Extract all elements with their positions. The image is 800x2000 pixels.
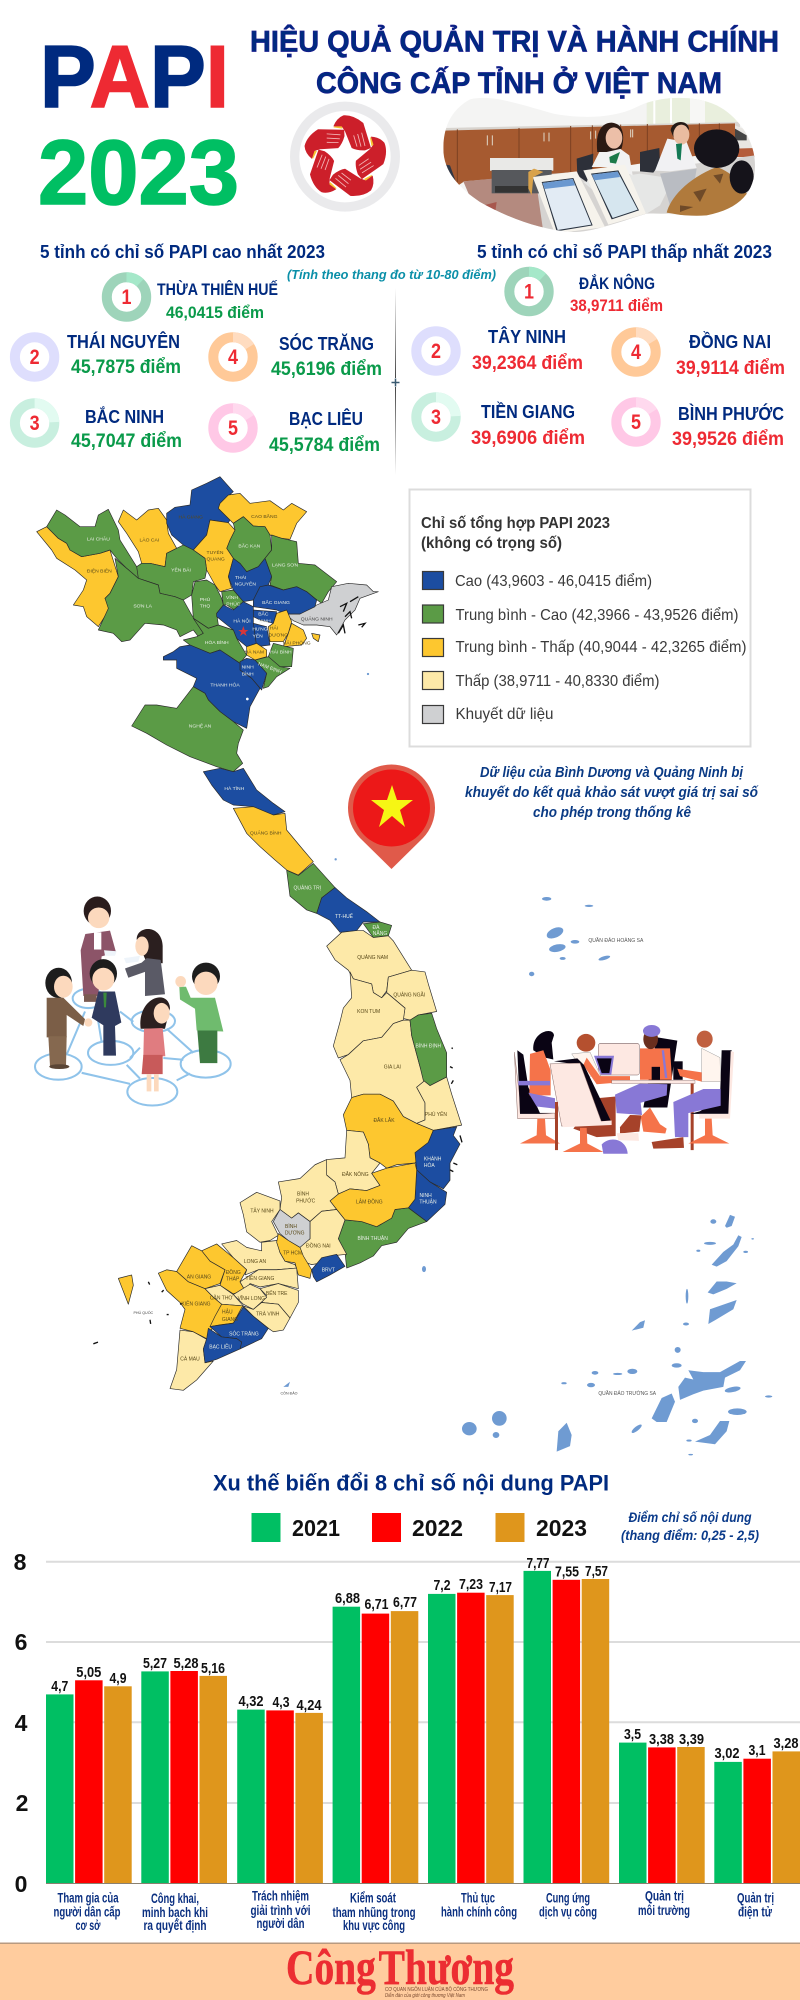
map: northern Vietnam provinces: BẮC GIANG bbox=[262, 598, 290, 606]
map: central and southern Vietnam provinces: CÀ MAU bbox=[180, 1355, 200, 1362]
map: central and southern Vietnam provinces: KIÊN GIANG bbox=[181, 1299, 211, 1308]
map: northern Vietnam provinces: CAO BẰNG bbox=[251, 512, 278, 520]
map: northern Vietnam provinces: LẠNG SƠN bbox=[272, 563, 298, 569]
rank card: Bắc Ninh: 45,7047 điểm bbox=[71, 431, 182, 452]
illustration: four people meeting at a table bbox=[514, 1025, 734, 1154]
bars: Thủ tục hành chính công: 7,23 bbox=[459, 1577, 483, 1593]
bars: Công khai, minh bạch: 5,27 bbox=[143, 1656, 167, 1672]
map: central and southern Vietnam provinces: PHÚ QUỐC bbox=[133, 1310, 153, 1315]
map: northern Vietnam provinces: THÁI bbox=[235, 574, 246, 581]
map: northern Vietnam provinces: NGHỆ AN bbox=[189, 722, 212, 730]
rank card: Tiền Giang: 3 bbox=[431, 406, 441, 429]
woman with purple headwrap bbox=[615, 1025, 677, 1141]
map: northern Vietnam provinces: QUẢNG NINH bbox=[301, 616, 333, 623]
map: northern Vietnam provinces: VĨNH bbox=[226, 594, 238, 601]
figure: woman in grey jacket bbox=[124, 929, 165, 996]
map: central and southern Vietnam provinces: DƯƠNG bbox=[285, 1231, 305, 1237]
footer band with Công Thương logo: Diễn đàn của giới công thương Việt Nam bbox=[385, 1992, 465, 1999]
bar chart: 4 bbox=[15, 1710, 28, 1736]
islands: Trường Sa archipelago bbox=[462, 1215, 772, 1455]
islands: Trường Sa archipelago: QUẦN ĐẢO TRƯỜNG SA bbox=[598, 1390, 657, 1397]
bars: Cung ứng dịch vụ công: 7,77 bbox=[526, 1556, 550, 1572]
chart title: Xu thế biến đổi 8 chỉ số nội dung PAPI bbox=[213, 1471, 609, 1496]
chart category labels: khu vực công bbox=[343, 1917, 405, 1933]
map: central and southern Vietnam provinces: CÔN ĐẢO bbox=[280, 1390, 298, 1395]
rank card: Bắc Ninh bbox=[15, 403, 182, 452]
rank card: Thái Nguyên: 2 bbox=[30, 346, 40, 369]
missing-data note: cho phép trong thống kê bbox=[533, 805, 691, 821]
rank card: Bạc Liêu: 45,5784 điểm bbox=[269, 435, 380, 456]
map: central and southern Vietnam provinces: TÂY NINH bbox=[250, 1208, 274, 1215]
rank card: Bình Phước: 39,9526 điểm bbox=[672, 429, 784, 450]
chart legend bbox=[252, 1513, 587, 1542]
rank card: Tây Ninh bbox=[416, 326, 583, 374]
map: central and southern Vietnam provinces: PHÚ YÊN bbox=[425, 1110, 447, 1118]
bars: Cung ứng dịch vụ công: 7,57 bbox=[585, 1564, 608, 1580]
score scale note bbox=[621, 1509, 759, 1543]
bars: Trách nhiệm giải trình bbox=[237, 1694, 323, 1883]
bars: Quản trị môi trường: 3,5 bbox=[624, 1727, 641, 1743]
map: northern Vietnam provinces: QUANG bbox=[207, 557, 225, 563]
rank card: Thái Nguyên: THÁI NGUYÊN bbox=[67, 331, 180, 352]
photo: citizens at digital service counter bbox=[440, 92, 760, 237]
map: northern Vietnam provinces: DƯƠNG bbox=[269, 633, 288, 639]
chart category labels: Quản trị bbox=[737, 1890, 774, 1906]
map: central and southern Vietnam provinces: NINH bbox=[420, 1193, 432, 1199]
bar chart: 8 bbox=[14, 1549, 27, 1575]
chart category labels: dịch vụ công bbox=[539, 1904, 597, 1920]
bars: Quản trị điện tử: 3,1 bbox=[748, 1743, 766, 1759]
man with short hair bbox=[652, 1031, 734, 1149]
bars: Tham gia của người dân cấp cơ sở bbox=[46, 1665, 132, 1883]
map: northern Vietnam provinces: THỌ bbox=[200, 604, 210, 610]
map: central and southern Vietnam provinces bbox=[93, 863, 462, 1395]
map: central and southern Vietnam provinces: VĨNH LONG bbox=[238, 1295, 265, 1302]
chart category labels: Quản trị bbox=[645, 1888, 684, 1904]
rank card: Tây Ninh: TÂY NINH bbox=[488, 326, 566, 347]
rank card: Thừa Thiên Huế: 1 bbox=[122, 286, 132, 309]
bar chart: 2 bbox=[16, 1790, 28, 1816]
chart legend: 2022 bbox=[412, 1515, 463, 1541]
missing-data note: khuyết do kết quả khảo sát vượt giá trị sai số bbox=[465, 785, 759, 801]
map: central and southern Vietnam provinces: ĐỒNG NAI bbox=[306, 1242, 331, 1249]
bars: Quản trị môi trường bbox=[619, 1727, 705, 1883]
chart category labels: tham nhũng trong bbox=[332, 1904, 416, 1920]
bars: Công khai, minh bạch: 5,28 bbox=[174, 1656, 198, 1672]
map: central and southern Vietnam provinces: BÌNH bbox=[285, 1223, 297, 1230]
figure: man in navy suit bbox=[90, 959, 121, 1056]
map: northern Vietnam provinces: HÀ NỘI bbox=[233, 618, 251, 625]
chart category labels: hành chính công bbox=[441, 1904, 517, 1920]
map: northern Vietnam provinces: BÌNH bbox=[242, 670, 254, 677]
chart category labels: điện tử bbox=[738, 1904, 773, 1920]
map: central and southern Vietnam provinces: HẬU bbox=[222, 1308, 233, 1316]
map: central and southern Vietnam provinces: CẦN THƠ bbox=[210, 1294, 233, 1301]
chart category labels: Cung ứng bbox=[546, 1890, 590, 1906]
bars: Tham gia của người dân cấp cơ sở: 4,9 bbox=[110, 1671, 126, 1687]
map: northern Vietnam provinces: PHÚ bbox=[200, 596, 211, 603]
rank card: Bình Phước: 5 bbox=[631, 411, 641, 434]
bar chart: 0 bbox=[15, 1871, 27, 1897]
rank card: Thừa Thiên Huế bbox=[107, 277, 278, 322]
chart category labels: giải trình với bbox=[250, 1902, 310, 1918]
legend panel bbox=[410, 490, 750, 746]
bar chart: 6 bbox=[15, 1629, 27, 1655]
map: northern Vietnam provinces: NINH bbox=[242, 665, 254, 671]
chart legend: 2023 bbox=[536, 1515, 587, 1541]
bars: Kiểm soát tham nhũng bbox=[333, 1591, 418, 1883]
section heading: bottom five provinces: 5 tỉnh có chỉ số PAPI thấp nhất 2023 bbox=[477, 241, 772, 262]
bars: Quản trị điện tử bbox=[714, 1736, 800, 1883]
bars: Quản trị môi trường: 3,38 bbox=[649, 1732, 674, 1748]
map: northern Vietnam provinces: NAM ĐỊNH bbox=[257, 661, 283, 676]
map: central and southern Vietnam provinces: BÌNH bbox=[297, 1190, 309, 1197]
map: northern Vietnam provinces: ĐIỆN BIÊN bbox=[87, 566, 112, 574]
chart category labels: Tham gia của bbox=[58, 1890, 119, 1906]
rank card: Sóc Trăng: SÓC TRĂNG bbox=[279, 333, 374, 354]
rank card: Đồng Nai: 4 bbox=[631, 341, 641, 364]
legend panel: (không có trọng số) bbox=[421, 535, 562, 552]
legend panel: Thấp (38,9711 - 40,8330 điểm) bbox=[456, 672, 660, 690]
map: central and southern Vietnam provinces: QUẢNG NAM bbox=[357, 954, 388, 961]
chart category labels: người dân cấp bbox=[54, 1904, 120, 1920]
rank card: Thái Nguyên: 45,7875 điểm bbox=[71, 357, 181, 378]
map: central and southern Vietnam provinces: BÌNH ĐỊNH bbox=[416, 1043, 441, 1050]
center divider bbox=[392, 288, 400, 475]
bars: Thủ tục hành chính công: 7,2 bbox=[434, 1578, 450, 1594]
chart category labels: Công khai, bbox=[151, 1890, 199, 1906]
bar chart bbox=[14, 1549, 800, 1897]
islands: Hoàng Sa archipelago: QUẦN ĐẢO HOÀNG SA bbox=[588, 937, 644, 944]
rank card: Sóc Trăng: 4 bbox=[228, 346, 238, 369]
map: northern Vietnam provinces: TUYÊN bbox=[207, 548, 224, 556]
rank card: Đắk Nông: 1 bbox=[524, 280, 534, 304]
map: northern Vietnam provinces: HẢI PHÒNG bbox=[283, 639, 311, 646]
rank card: Tây Ninh: 2 bbox=[431, 340, 441, 363]
footer band with Công Thương logo bbox=[0, 1939, 800, 2000]
map: central and southern Vietnam provinces: SÓC TRĂNG bbox=[229, 1330, 259, 1338]
rank card: Thừa Thiên Huế: THỪA THIÊN HUẾ bbox=[157, 280, 278, 299]
map: northern Vietnam provinces: HÀ GIANG bbox=[178, 514, 203, 521]
desktop monitor and laptop bbox=[594, 1044, 639, 1075]
map: northern Vietnam provinces: YÊN bbox=[253, 632, 263, 640]
map: central and southern Vietnam provinces: THUẬN bbox=[419, 1199, 437, 1206]
main title: HIỆU QUẢ QUẢN TRỊ VÀ HÀNH CHÍNH bbox=[250, 24, 779, 58]
figure: man in green sweater bbox=[175, 963, 223, 1063]
rank card: Tiền Giang bbox=[416, 397, 585, 449]
rank card: Đồng Nai bbox=[616, 331, 785, 379]
map: central and southern Vietnam provinces: QUẢNG TRỊ bbox=[293, 885, 321, 892]
legend panel: Cao (43,9603 - 46,0415 điểm) bbox=[455, 572, 652, 590]
rank card: Thái Nguyên bbox=[15, 331, 181, 378]
map: central and southern Vietnam provinces: PHƯỚC bbox=[296, 1197, 316, 1204]
icon: map pin with Vietnam flag bbox=[348, 764, 435, 869]
rank card: Đắk Nông: 38,9711 điểm bbox=[570, 296, 663, 315]
chart legend: 2021 bbox=[292, 1515, 340, 1541]
rank card: Đồng Nai: ĐỒNG NAI bbox=[689, 331, 771, 352]
map: central and southern Vietnam provinces: NẴNG bbox=[373, 930, 387, 937]
bars: Kiểm soát tham nhũng: 6,88 bbox=[335, 1591, 360, 1607]
front chair bbox=[550, 1058, 628, 1154]
bars: Công khai, minh bạch: 5,16 bbox=[201, 1661, 225, 1677]
map: northern Vietnam provinces: HÀ TĨNH bbox=[224, 785, 245, 792]
icon: PAPI hands-star logo bbox=[295, 106, 395, 207]
table with cups bbox=[555, 1050, 695, 1150]
legend panel: Trung bình - Thấp (40,9044 - 42,3265 điểm) bbox=[456, 638, 746, 656]
map: northern Vietnam provinces: BẮC bbox=[258, 609, 269, 617]
rank card: Tây Ninh: 39,2364 điểm bbox=[472, 353, 583, 374]
map: central and southern Vietnam provinces: ĐẮK NÔNG bbox=[342, 1170, 369, 1178]
bars: Cung ứng dịch vụ công bbox=[524, 1556, 609, 1883]
legend panel: Chỉ số tổng hợp PAPI 2023 bbox=[421, 514, 610, 532]
map: northern Vietnam provinces: PHÚC bbox=[226, 601, 241, 608]
legend panel: Trung bình - Cao (42,3966 - 43,9526 điểm) bbox=[456, 606, 738, 624]
rank card: Đắk Nông bbox=[509, 272, 663, 315]
rank card: Bạc Liêu bbox=[213, 408, 380, 456]
map: northern Vietnam provinces: BẮC KẠN bbox=[238, 542, 261, 550]
chart category labels: Trách nhiệm bbox=[252, 1888, 309, 1904]
rank card: Sóc Trăng: 45,6196 điểm bbox=[271, 359, 382, 380]
main title bbox=[250, 24, 779, 100]
map: central and southern Vietnam provinces: BRVT bbox=[322, 1267, 335, 1274]
map: central and southern Vietnam provinces: THÁP bbox=[226, 1275, 240, 1282]
map: central and southern Vietnam provinces: BẠC LIÊU bbox=[209, 1342, 232, 1350]
scale note: (Tính theo thang đo từ 10-80 điểm) bbox=[287, 267, 496, 282]
rank card: Bạc Liêu: 5 bbox=[228, 417, 238, 440]
bars: Thủ tục hành chính công: 7,17 bbox=[489, 1580, 512, 1596]
map: central and southern Vietnam provinces: TT-HUẾ bbox=[335, 913, 354, 920]
map: northern Vietnam provinces bbox=[37, 477, 378, 875]
map: central and southern Vietnam provinces: LONG AN bbox=[244, 1259, 266, 1265]
score scale note: (thang điểm: 0,25 - 2,5) bbox=[621, 1527, 759, 1543]
map: central and southern Vietnam provinces: ĐÀ bbox=[373, 924, 380, 931]
map: northern Vietnam provinces: SƠN LA bbox=[133, 604, 153, 610]
bars: Quản trị môi trường: 3,39 bbox=[679, 1732, 704, 1748]
chart category labels: người dân bbox=[256, 1915, 304, 1931]
map: northern Vietnam provinces: NGUYÊN bbox=[235, 580, 256, 588]
islands: Hoàng Sa archipelago bbox=[529, 897, 644, 976]
chart category labels: Kiểm soát bbox=[350, 1890, 396, 1906]
map: northern Vietnam provinces: LÀO CAI bbox=[139, 537, 159, 544]
map: central and southern Vietnam provinces: LÂM ĐỒNG bbox=[356, 1198, 383, 1205]
map: central and southern Vietnam provinces: TIỀN GIANG bbox=[246, 1275, 274, 1282]
map: central and southern Vietnam provinces: KHÁNH bbox=[424, 1155, 442, 1162]
bars: Kiểm soát tham nhũng: 6,71 bbox=[364, 1597, 388, 1613]
rank card: Bắc Ninh: BẮC NINH bbox=[85, 406, 164, 427]
map: northern Vietnam provinces: QUẢNG BÌNH bbox=[250, 829, 282, 836]
bars: Thủ tục hành chính công bbox=[428, 1577, 514, 1883]
map: central and southern Vietnam provinces: BÌNH THUẬN bbox=[357, 1235, 388, 1242]
map: central and southern Vietnam provinces: HÒA bbox=[424, 1162, 435, 1169]
woman with glasses bbox=[572, 1034, 630, 1137]
rank card: Sóc Trăng bbox=[213, 333, 382, 380]
map: central and southern Vietnam provinces: TP HCM bbox=[283, 1250, 302, 1256]
bars: Công khai, minh bạch bbox=[141, 1656, 227, 1883]
map: northern Vietnam provinces: HÒA BÌNH bbox=[205, 639, 229, 646]
map: central and southern Vietnam provinces: GIANG bbox=[222, 1317, 238, 1323]
figure: man in brown suit bbox=[45, 968, 92, 1069]
map: northern Vietnam provinces: THÁI BÌNH bbox=[267, 649, 292, 656]
rank card: Thừa Thiên Huế: 46,0415 điểm bbox=[166, 303, 264, 322]
bars: Kiểm soát tham nhũng: 6,77 bbox=[393, 1595, 417, 1611]
bars: Tham gia của người dân cấp cơ sở: 5,05 bbox=[76, 1665, 101, 1681]
map: central and southern Vietnam provinces: GIA LAI bbox=[384, 1065, 401, 1071]
rank card: Tiền Giang: TIỀN GIANG bbox=[481, 401, 575, 422]
rank card: Đồng Nai: 39,9114 điểm bbox=[676, 358, 785, 379]
main title: CÔNG CẤP TỈNH Ở VIỆT NAM bbox=[316, 66, 722, 100]
bars: Trách nhiệm giải trình: 4,3 bbox=[272, 1695, 290, 1711]
chart category labels: minh bạch khi bbox=[142, 1904, 208, 1920]
big PAPI wordmark: PAPI bbox=[40, 27, 229, 126]
map: central and southern Vietnam provinces: TRÀ VINH bbox=[256, 1310, 280, 1318]
map: northern Vietnam provinces: NINH bbox=[259, 619, 271, 625]
bars: Trách nhiệm giải trình: 4,32 bbox=[238, 1694, 264, 1710]
map: northern Vietnam provinces: YÊN BÁI bbox=[171, 565, 191, 573]
map: central and southern Vietnam provinces: AN GIANG bbox=[187, 1274, 211, 1280]
missing-data note bbox=[465, 765, 759, 821]
rank card: Bắc Ninh: 3 bbox=[30, 412, 40, 435]
rank card: Bình Phước bbox=[616, 402, 784, 450]
footer band with Công Thương logo: CƠ QUAN NGÔN LUẬN CỦA BỘ CÔNG THƯƠNG bbox=[385, 1986, 488, 1993]
legend panel: Khuyết dữ liệu bbox=[456, 706, 554, 723]
rank card: Tiền Giang: 39,6906 điểm bbox=[471, 428, 585, 449]
map: northern Vietnam provinces: HƯNG bbox=[252, 627, 268, 633]
bars: Cung ứng dịch vụ công: 7,55 bbox=[555, 1564, 579, 1580]
bars: Quản trị điện tử: 3,02 bbox=[714, 1746, 740, 1762]
illustration: people connected in a network bbox=[35, 897, 231, 1106]
woman with dark hair bbox=[518, 1031, 555, 1109]
map: northern Vietnam provinces: HÀ NAM bbox=[245, 648, 264, 655]
chart category labels: Thủ tục bbox=[461, 1890, 495, 1906]
chart category labels: ra quyết định bbox=[144, 1917, 206, 1933]
rank card: Bình Phước: BÌNH PHƯỚC bbox=[678, 403, 784, 424]
footer band with Công Thương logo: Công Thương bbox=[286, 1939, 514, 1995]
map: northern Vietnam provinces: LAI CHÂU bbox=[87, 536, 110, 543]
map: northern Vietnam provinces: THANH HÓA bbox=[210, 682, 240, 689]
map: central and southern Vietnam provinces: QUẢNG NGÃI bbox=[393, 991, 425, 998]
figure: woman in pink sweater bbox=[140, 997, 170, 1091]
rank card: Đắk Nông: ĐẮK NÔNG bbox=[579, 274, 655, 293]
figure: woman in burgundy suit bbox=[81, 897, 117, 1002]
big year 2023: 2023 bbox=[38, 122, 239, 224]
rank card: Bạc Liêu: BẠC LIÊU bbox=[289, 408, 363, 429]
missing-data note: Dữ liệu của Bình Dương và Quảng Ninh bị bbox=[480, 765, 744, 781]
left chair bbox=[514, 1050, 560, 1143]
bars: Trách nhiệm giải trình: 4,24 bbox=[296, 1698, 322, 1714]
map: central and southern Vietnam provinces: ĐỒNG bbox=[226, 1269, 241, 1276]
map: northern Vietnam provinces: HẢI bbox=[270, 624, 278, 631]
map: central and southern Vietnam provinces: KON TUM bbox=[357, 1009, 380, 1015]
section heading: top five provinces: 5 tỉnh có chỉ số PAPI cao nhất 2023 bbox=[40, 241, 325, 262]
bars: Tham gia của người dân cấp cơ sở: 4,7 bbox=[51, 1679, 68, 1695]
chart category labels bbox=[54, 1888, 774, 1933]
map: central and southern Vietnam provinces: BẾN TRE bbox=[266, 1290, 288, 1297]
map: central and southern Vietnam provinces: ĐẮK LẮK bbox=[373, 1116, 395, 1124]
score scale note: Điểm chỉ số nội dung bbox=[628, 1509, 752, 1525]
chart category labels: cơ sở bbox=[76, 1917, 101, 1933]
chart category labels: môi trường bbox=[638, 1902, 690, 1918]
